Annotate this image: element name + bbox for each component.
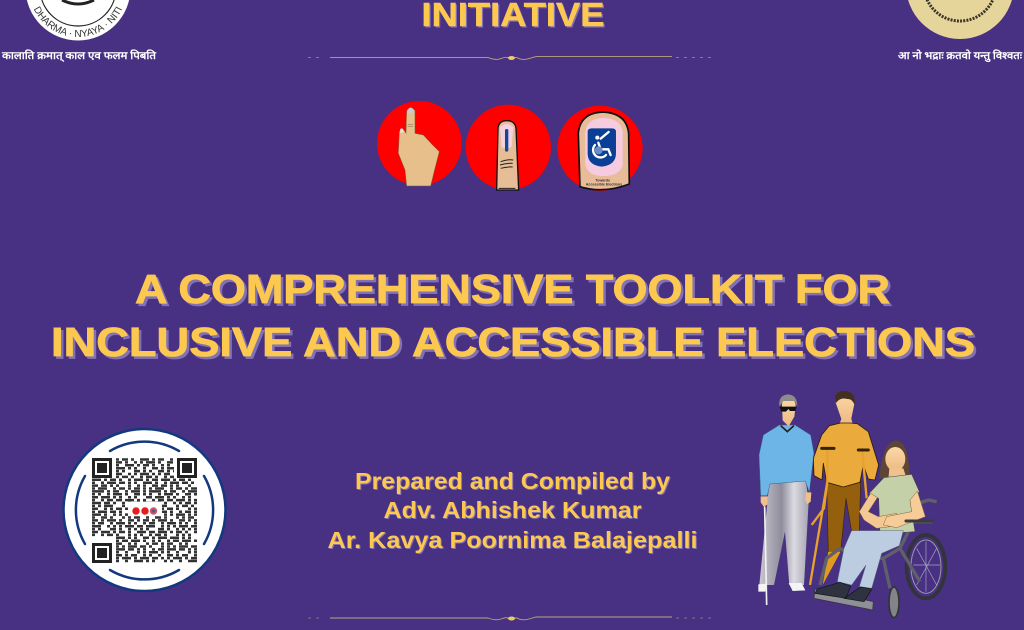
icon: thumb with accessibility symbol — [557, 106, 643, 191]
bottom divider — [308, 616, 716, 620]
title: INCLUSIVE AND ACCESSIBLE ELECTIONS — [51, 319, 975, 365]
credits: Adv. Abhishek Kumar — [384, 497, 642, 523]
title — [51, 266, 978, 368]
right motto: आ नो भद्राः क्रतवो यन्तु विश्वतः — [898, 49, 1023, 63]
left motto: कालाति क्रमात् काल एव फलम पिबति — [1, 49, 157, 62]
QR code badge — [64, 429, 226, 591]
credits: Prepared and Compiled by — [355, 468, 670, 494]
arms — [859, 493, 897, 528]
woman in wheelchair — [814, 440, 945, 618]
title: INCLUSIVE AND ACCESSIBLE ELECTIONS — [54, 322, 978, 368]
QR finder squares — [94, 460, 196, 562]
title: A COMPREHENSIVE TOOLKIT FOR — [135, 266, 890, 312]
man with crutches — [810, 391, 879, 585]
icon: inked finger — [466, 105, 551, 190]
man with white cane — [758, 394, 814, 605]
illustration: people with disabilities — [758, 391, 945, 618]
top divider — [308, 56, 716, 60]
credits: Ar. Kavya Poornima Balajepalli — [328, 527, 698, 553]
left logo: DHARMA · NYAYA · NITI — [34, 6, 122, 37]
right logo — [906, 0, 1014, 39]
icon: thumb with accessibility symbol: Accessible Elections — [586, 182, 622, 186]
icon: thumb with accessibility symbol: Towards — [595, 178, 610, 182]
credits: Adv. Abhishek Kumar — [384, 498, 643, 524]
credits — [328, 468, 698, 554]
wheelchair wheels and frame — [814, 500, 945, 618]
icon: raised finger — [377, 101, 462, 186]
credits: Ar. Kavya Poornima Balajepalli — [328, 528, 698, 554]
QR centre logo — [132, 507, 157, 515]
credits: Prepared and Compiled by — [356, 469, 671, 495]
title: A COMPREHENSIVE TOOLKIT FOR — [138, 268, 892, 314]
